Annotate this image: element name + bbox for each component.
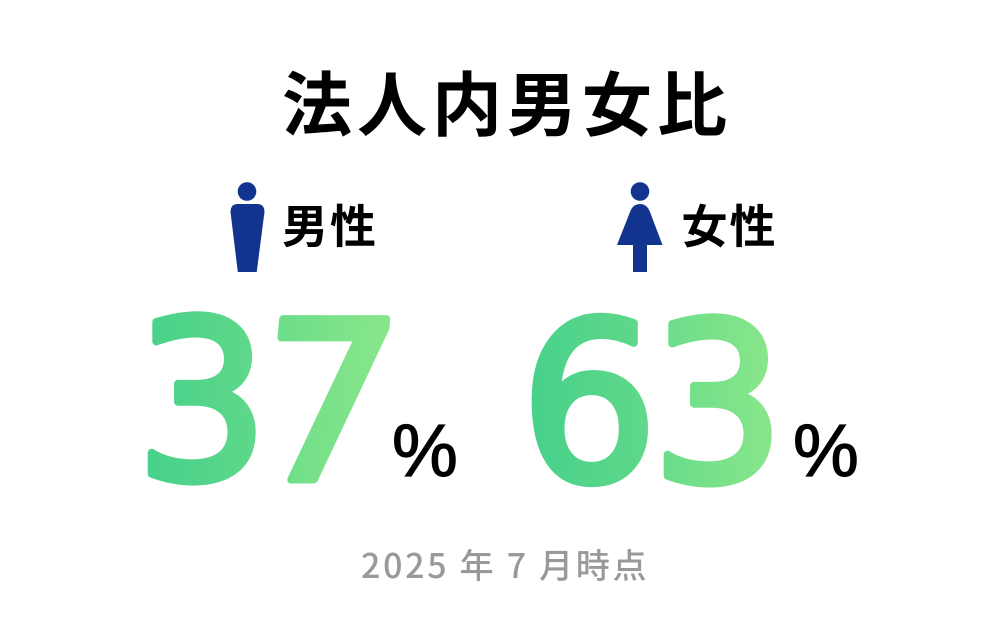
- icon: female figure: [617, 182, 662, 272]
- male percentage number: [136, 274, 409, 531]
- label: male: 男性: [282, 191, 378, 257]
- female percentage number: [520, 276, 785, 533]
- panel: female: [520, 182, 859, 533]
- male percentage number: 7: [246, 275, 409, 531]
- panel: male: [136, 182, 458, 531]
- percent sign: male: %: [392, 409, 458, 492]
- female percentage number: 6: [520, 277, 658, 533]
- icon: male figure: [230, 182, 264, 272]
- footnote: date: 2025 年 7 月時点: [361, 539, 649, 588]
- title: 法人内男女比: [282, 50, 732, 151]
- percent sign: female: %: [793, 409, 859, 492]
- female percentage number: 3: [652, 276, 785, 533]
- label: female: 女性: [682, 191, 778, 257]
- male percentage number: 3: [136, 274, 269, 531]
